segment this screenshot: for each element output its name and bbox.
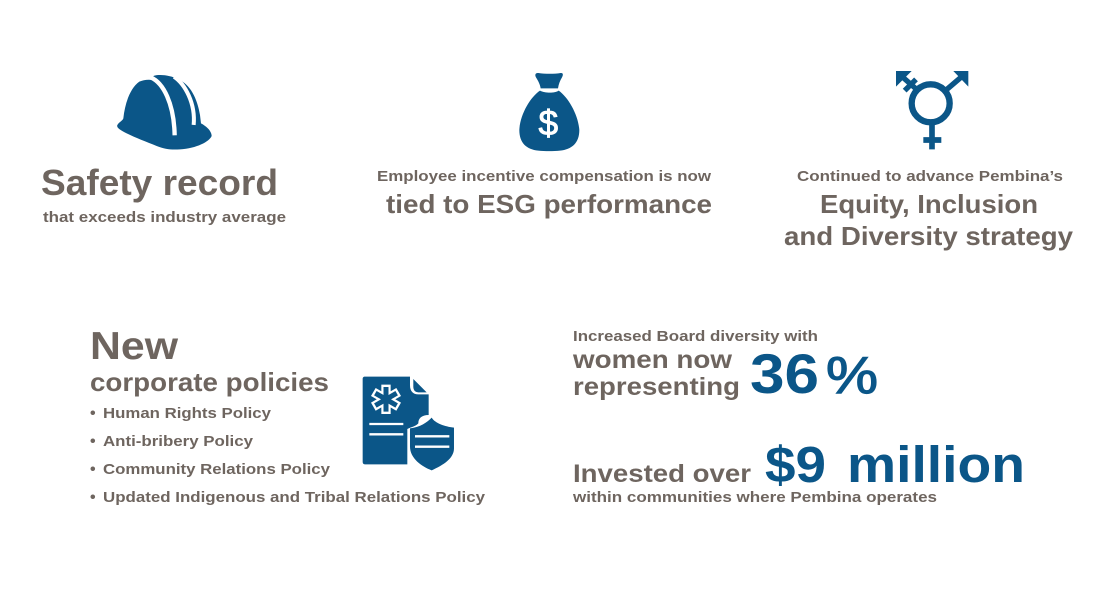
list: policies: Human Rights Policy <box>103 405 272 422</box>
stat: 9 million dollars: million <box>847 436 1025 493</box>
heading: tied to ESG performance: tied to ESG performance <box>386 189 712 219</box>
icon: hard hat <box>117 75 212 150</box>
heading: diversity strategy: and Diversity strategy <box>784 221 1074 251</box>
icon: transgender symbol <box>896 71 968 149</box>
panel: board diversity <box>572 328 878 405</box>
text: exceeds industry average: that exceeds industry average <box>43 209 286 226</box>
icon: money bag: $ <box>539 104 559 143</box>
panel: safety record <box>41 75 286 226</box>
text: invested over: Invested over <box>573 460 751 488</box>
panel: incentive compensation <box>377 73 712 219</box>
heading: equity inclusion: Equity, Inclusion <box>820 189 1038 219</box>
list: policies: • <box>90 461 96 478</box>
icon: money bag <box>519 73 579 151</box>
list: policies: • <box>90 405 96 422</box>
list: policies: • <box>90 433 96 450</box>
list: policies <box>90 405 486 506</box>
list: policies: Updated Indigenous and Tribal Relations Policy <box>103 489 486 506</box>
panel: equity inclusion diversity <box>784 71 1074 251</box>
stat: 36 percent <box>750 342 878 405</box>
icon: document and shield <box>363 377 454 470</box>
list: policies: • <box>90 489 96 506</box>
subheading: corporate policies: corporate policies <box>90 367 329 397</box>
text: representing: representing <box>573 373 740 401</box>
stat: 9 million dollars: $9 <box>765 436 826 493</box>
text: employee incentive compensation: Employee incentive compensation is now <box>377 168 711 185</box>
heading: safety record: Safety record <box>41 162 278 203</box>
panel: community investment <box>572 436 1025 506</box>
heading: new: New <box>90 325 179 368</box>
stat: 36 percent: 36 <box>750 342 819 405</box>
text: continued to advance: Continued to advance Pembina’s <box>797 168 1063 185</box>
list: policies: Community Relations Policy <box>103 461 331 478</box>
list: policies: Anti-bribery Policy <box>103 433 254 450</box>
text: increased board diversity: Increased Board diversity with <box>573 328 818 345</box>
text: within communities: within communities where Pembina operates <box>572 489 937 506</box>
panel: corporate policies <box>90 325 486 506</box>
stat: 9 million dollars <box>765 436 1025 493</box>
text: women now: women now <box>572 346 733 374</box>
stat: 36 percent: % <box>826 347 878 405</box>
